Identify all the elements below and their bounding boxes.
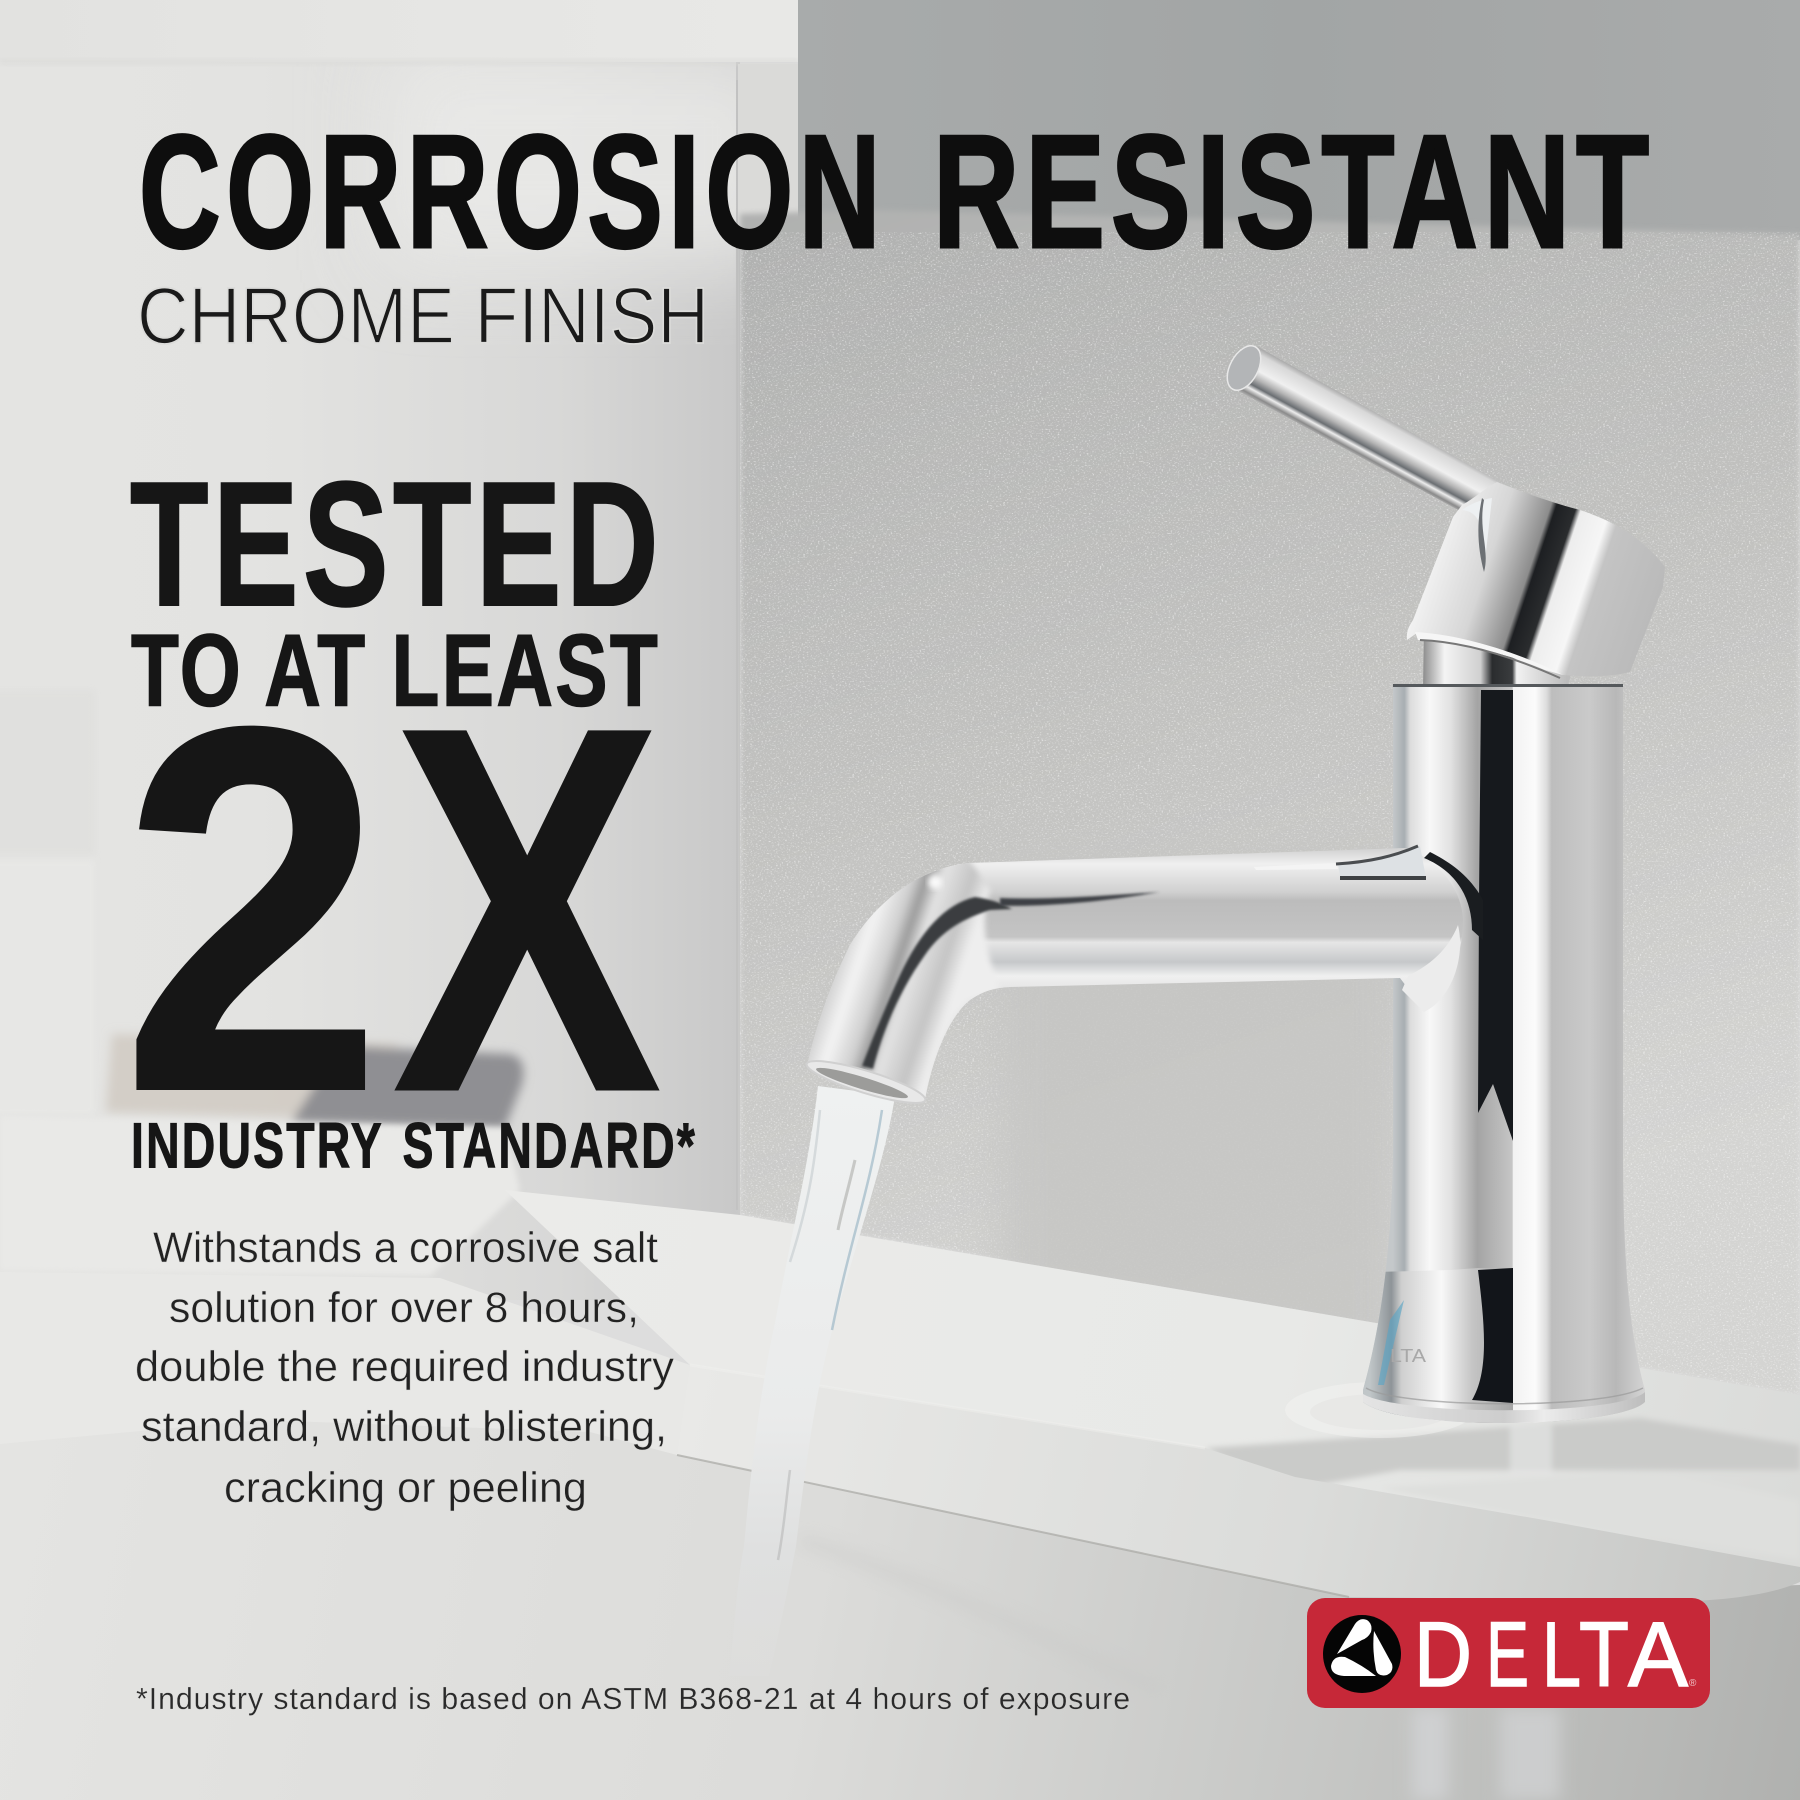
wordmark [1414, 1604, 1689, 1706]
counter front face [677, 1365, 1800, 1602]
body description: cracking or peeling [224, 1464, 587, 1512]
title: corrosion resistant: CORROSION [139, 102, 886, 282]
wordmark: D [1414, 1604, 1472, 1706]
lever handle [1220, 340, 1500, 512]
claim: tested: TESTED [130, 445, 663, 643]
lower dark reflection [1472, 1268, 1513, 1403]
wordmark: T [1579, 1604, 1629, 1706]
body description [135, 1224, 674, 1512]
upper dark reflection [1478, 690, 1513, 1141]
logo: Delta: ® [1689, 1678, 1697, 1689]
counter left [0, 1272, 690, 1460]
wordmark: A [1628, 1604, 1689, 1706]
body description: double the required industry [135, 1343, 674, 1391]
claim: 2X: X [393, 619, 663, 1199]
faucet base ring on the counter [1285, 1382, 1475, 1438]
faucet [796, 340, 1665, 1440]
wordmark: E [1486, 1604, 1529, 1706]
claim: 2X [121, 619, 663, 1199]
upper right grey panel [798, 0, 1800, 240]
claim: to at least: TO AT LEAST [131, 614, 660, 728]
body description: standard, without blistering, [141, 1403, 667, 1451]
outlet ring [803, 1053, 929, 1111]
footnote: *Industry standard is based on ASTM B368-21 at 4 hours of exposure [136, 1681, 1131, 1716]
neck [1423, 630, 1572, 690]
blurred book and phone [106, 1034, 524, 1128]
sink bowl and lower surface [0, 1420, 1800, 1800]
spout bend [808, 863, 996, 1095]
faucet body column and flared base: LTA [1390, 1346, 1426, 1366]
logo: Delta [1307, 1598, 1710, 1708]
spout [796, 846, 1483, 1111]
textured wall [740, 210, 1800, 1395]
top rim [1393, 684, 1623, 687]
left tray [0, 1116, 520, 1276]
water stream [729, 1086, 895, 1676]
left wall panel [0, 0, 740, 1300]
bend dark reflection [862, 897, 1012, 1069]
streaks below the logo [1412, 1708, 1560, 1800]
lower flare section [1363, 1268, 1513, 1415]
icon: Delta tri-drop mark [1323, 1615, 1401, 1693]
faucet body column and flared base [1340, 684, 1645, 1440]
claim: 2X: 2 [121, 619, 383, 1199]
body description: solution for over 8 hours, [169, 1284, 639, 1332]
claim: industry standard: INDUSTRY STANDARD* [131, 1110, 697, 1182]
counter top surface [505, 1190, 1800, 1570]
wordmark: L [1542, 1604, 1581, 1706]
left blue edge [1378, 1300, 1404, 1385]
bowl marble veins [800, 1540, 1160, 1690]
junction dark curve [1424, 852, 1483, 940]
subtitle: chrome finish: CHROME FINISH [137, 271, 709, 360]
body description: Withstands a corrosive salt [153, 1224, 658, 1272]
counter reflection bands [1205, 1418, 1800, 1560]
base lens [1363, 1392, 1645, 1423]
handle body [1407, 482, 1665, 678]
